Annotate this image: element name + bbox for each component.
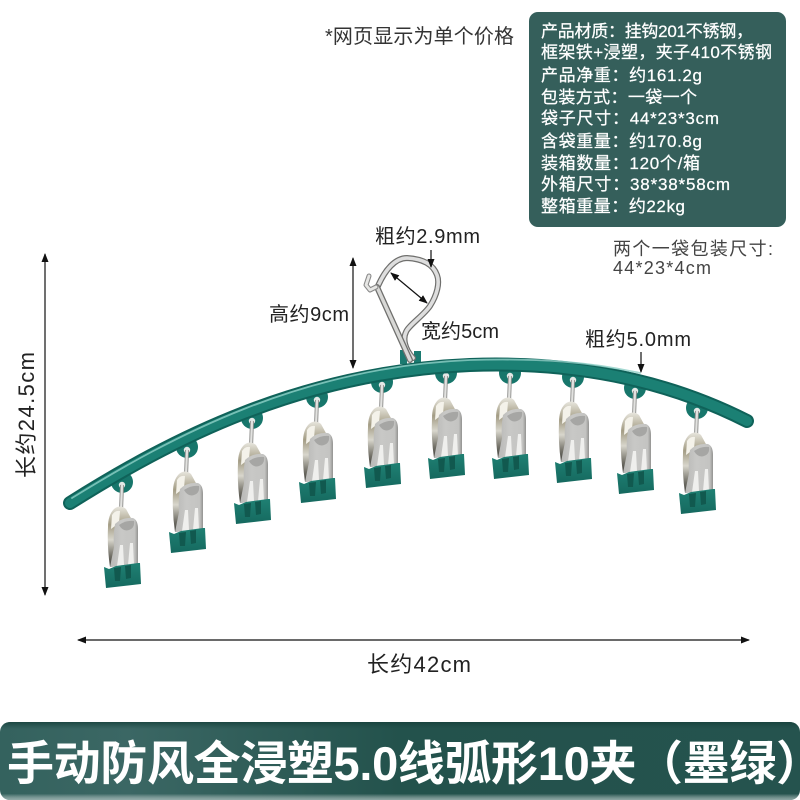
clip 6 — [428, 362, 465, 479]
hook: base clamp — [400, 350, 421, 364]
arrow: overall height — [44, 254, 46, 595]
panel: product specifications — [529, 12, 786, 227]
clip 3 — [234, 407, 271, 524]
panel: product specifications: 包装方式：一袋一个 — [541, 88, 697, 107]
clip 1 — [104, 471, 141, 588]
panel: product specifications: 整箱重量：约22kg — [541, 197, 685, 216]
panel: product specifications: 产品材质：挂钩201不锈钢， — [541, 22, 753, 41]
panel: product specifications: 装箱数量：120个/箱 — [541, 154, 700, 173]
note: two-in-a-bag package size: 两个一袋包装尺寸: — [613, 239, 773, 259]
clip 4 — [299, 386, 336, 503]
label: hook thickness: 粗约2.9mm — [375, 225, 480, 248]
clip 5 — [364, 371, 401, 488]
arrow: hook width — [391, 273, 427, 303]
clip 9 — [617, 377, 654, 494]
panel: product specifications: 框架铁+浸塑，夹子410不锈钢 — [541, 43, 772, 62]
arrow: thickness of hook — [430, 250, 432, 267]
arched hanger bar — [70, 360, 747, 503]
clip 10 — [679, 397, 716, 514]
clip 8 — [555, 366, 592, 483]
panel: product specifications: 含袋重量：约170.8g — [541, 132, 702, 151]
note: two-in-a-bag package size — [613, 239, 773, 278]
title banner — [0, 722, 800, 800]
arrow: bar thickness — [640, 352, 642, 372]
panel: product specifications: 袋子尺寸：44*23*3cm — [541, 109, 719, 128]
title banner: 手动防风全浸塑5.0线弧形10夹（墨绿） — [7, 737, 800, 790]
hanger clips row — [104, 362, 716, 588]
note: per-item price: *网页显示为单个价格 — [325, 25, 514, 48]
panel: product specifications: 外箱尺寸：38*38*58cm — [541, 175, 730, 194]
clip 7 — [492, 362, 529, 479]
label: hook height: 高约9cm — [269, 303, 349, 326]
clip 2 — [169, 436, 206, 553]
label: hook width: 宽约5cm — [421, 320, 499, 343]
label: overall length: 长约42cm — [367, 652, 471, 677]
note: two-in-a-bag package size: 44*23*4cm — [613, 258, 711, 278]
panel: product specifications: 产品净重：约161.2g — [541, 66, 702, 85]
stainless steel hook — [366, 258, 438, 360]
label: overall height: 长约24.5cm — [14, 352, 39, 478]
arrow: overall length — [78, 639, 749, 641]
arrow: hook height — [352, 258, 354, 368]
label: bar thickness: 粗约5.0mm — [585, 328, 691, 351]
